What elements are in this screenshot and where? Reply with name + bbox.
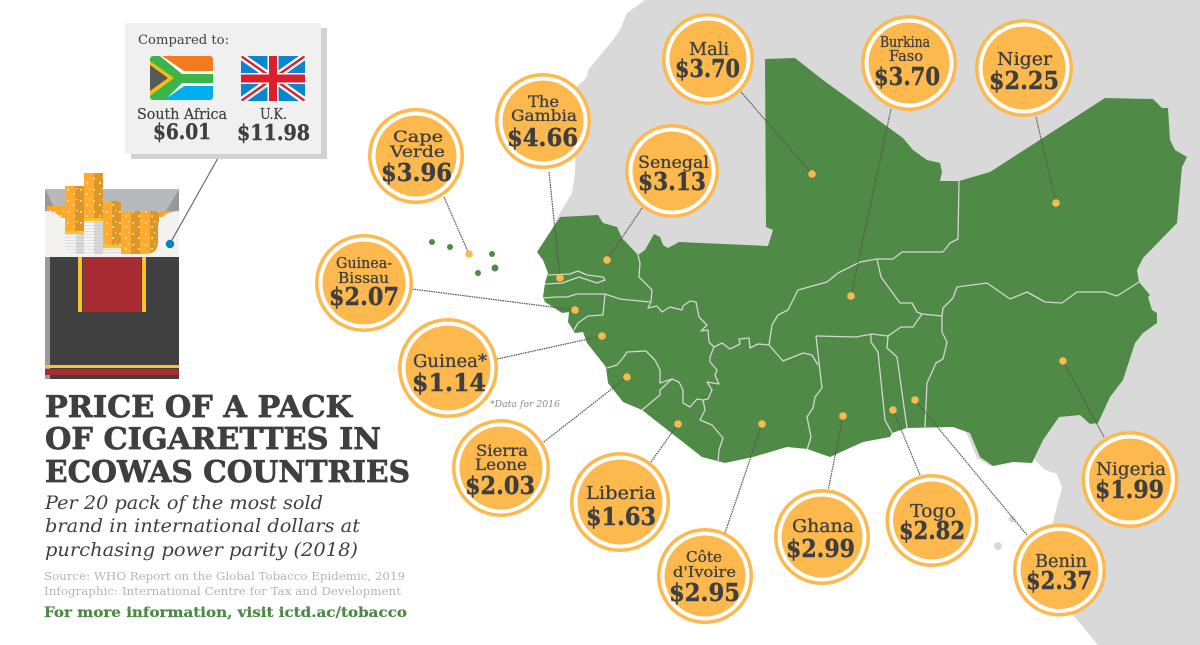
bubble: Togo: Togo — [910, 502, 956, 522]
bubble: Burkina Faso: $3.70 — [874, 62, 940, 91]
title — [45, 390, 410, 490]
gulf islands — [994, 516, 1016, 550]
bubble: Sierra Leone: Leone — [475, 455, 527, 474]
bubble: Guinea-Bissau — [315, 234, 413, 332]
footnote: *Data for 2016 — [490, 399, 560, 410]
bubble: Ghana: $2.99 — [786, 534, 855, 563]
bubble: Togo: $2.82 — [899, 516, 965, 545]
bubble: Cape Verde: Cape — [393, 127, 443, 146]
bubble: Burkina Faso: Burkina — [880, 33, 930, 51]
bubble: Senegal — [625, 124, 719, 218]
source text — [44, 569, 405, 598]
source text: Infographic: International Centre for Tax and Development — [44, 584, 401, 598]
bubble: Benin: $2.37 — [1026, 566, 1092, 595]
flag: UK — [241, 56, 305, 101]
bubble: Sierra Leone — [452, 419, 550, 517]
bubble: The Gambia: $4.66 — [507, 123, 578, 152]
bubble: Senegal: $3.13 — [638, 167, 706, 196]
bubble: Mali: $3.70 — [675, 54, 740, 83]
title: PRICE OF A PACK — [45, 390, 353, 425]
bubble: Cape Verde: $3.96 — [381, 158, 452, 187]
title: OF CIGARETTES IN — [45, 422, 381, 457]
bubble: The Gambia: The — [528, 92, 559, 111]
pack inner lid — [45, 189, 179, 213]
bubble: Guinea: Guinea* — [413, 352, 487, 372]
subtitle: brand in international dollars at — [45, 516, 361, 537]
ECOWAS countries landmass — [537, 58, 1187, 466]
bubble: Benin — [1013, 524, 1106, 616]
pack body — [45, 257, 179, 379]
bubble: Cape Verde — [368, 108, 464, 204]
bubble: Nigeria: $1.99 — [1095, 475, 1164, 504]
bubble: Cote d'Ivoire: d'Ivoire — [673, 563, 736, 581]
source text: Source: WHO Report on the Global Tobacco Epidemic, 2019 — [44, 569, 405, 583]
bubble: Guinea-Bissau: Bissau — [338, 269, 389, 287]
bubble: Senegal: Senegal — [638, 153, 709, 172]
marker dot — [166, 240, 174, 248]
bubble: Ghana — [774, 489, 870, 585]
bubble: Nigeria — [1082, 431, 1178, 528]
icon: cigarette pack — [45, 173, 179, 379]
bubble: The Gambia — [495, 73, 591, 169]
bubble: Niger: $2.25 — [989, 66, 1059, 95]
bubble: Niger: Niger — [997, 50, 1053, 70]
cigarettes — [47, 173, 174, 256]
bubble: The Gambia: Gambia — [511, 106, 577, 125]
bubble: Sierra Leone: Sierra — [476, 441, 528, 460]
South Africa price — [137, 105, 227, 144]
bubble: Guinea-Bissau: Guinea- — [336, 254, 392, 272]
bubble: Burkina Faso — [861, 15, 957, 111]
UK price: U.K. — [260, 105, 287, 123]
pack front pocket — [45, 211, 179, 258]
flag: South Africa — [150, 56, 213, 100]
South Africa price: $6.01 — [153, 119, 211, 144]
bubble: Ghana: Ghana — [792, 517, 854, 537]
bubble: Sierra Leone: $2.03 — [465, 471, 535, 500]
Cape Verde islands — [429, 239, 498, 276]
bubble: Guinea-Bissau: $2.07 — [329, 282, 399, 311]
subtitle — [44, 493, 361, 561]
callout heading: Compared to: — [138, 33, 229, 48]
bubble: Togo — [886, 474, 978, 567]
bubble: Guinea — [398, 318, 498, 418]
bubble: Mali — [662, 13, 754, 105]
subtitle: purchasing power parity (2018) — [45, 540, 358, 561]
bubble: Benin: Benin — [1035, 552, 1087, 572]
bubble: Niger — [975, 19, 1073, 117]
bubble: Burkina Faso: Faso — [889, 47, 923, 65]
bubble: Cote d'Ivoire: Côte — [686, 548, 722, 566]
bubble: Liberia: $1.63 — [586, 502, 656, 531]
bubble: Nigeria: Nigeria — [1096, 460, 1166, 480]
country borders — [543, 181, 1139, 463]
bubble: Liberia: Liberia — [586, 484, 656, 504]
callout connector — [172, 158, 218, 240]
title: ECOWAS COUNTRIES — [45, 455, 410, 490]
bubble: Cote d'Ivoire — [657, 528, 753, 624]
surrounding land — [548, 0, 1200, 645]
bubble: Cote d'Ivoire: $2.95 — [669, 578, 740, 607]
South Africa price: South Africa — [137, 105, 227, 123]
subtitle: Per 20 pack of the most sold — [44, 493, 323, 514]
map: West Africa — [429, 0, 1200, 645]
UK price: $11.98 — [237, 120, 310, 145]
UK price — [237, 105, 310, 145]
bubble: Guinea: $1.14 — [412, 368, 486, 397]
bubble: Mali: Mali — [689, 40, 729, 60]
leader lines and location dots — [412, 92, 1104, 535]
bubble: Cape Verde: Verde — [389, 142, 445, 161]
bubble: Liberia — [570, 452, 670, 552]
callout: compared to — [125, 23, 327, 159]
more information link text: For more information, visit ictd.ac/tobacco — [44, 605, 407, 621]
